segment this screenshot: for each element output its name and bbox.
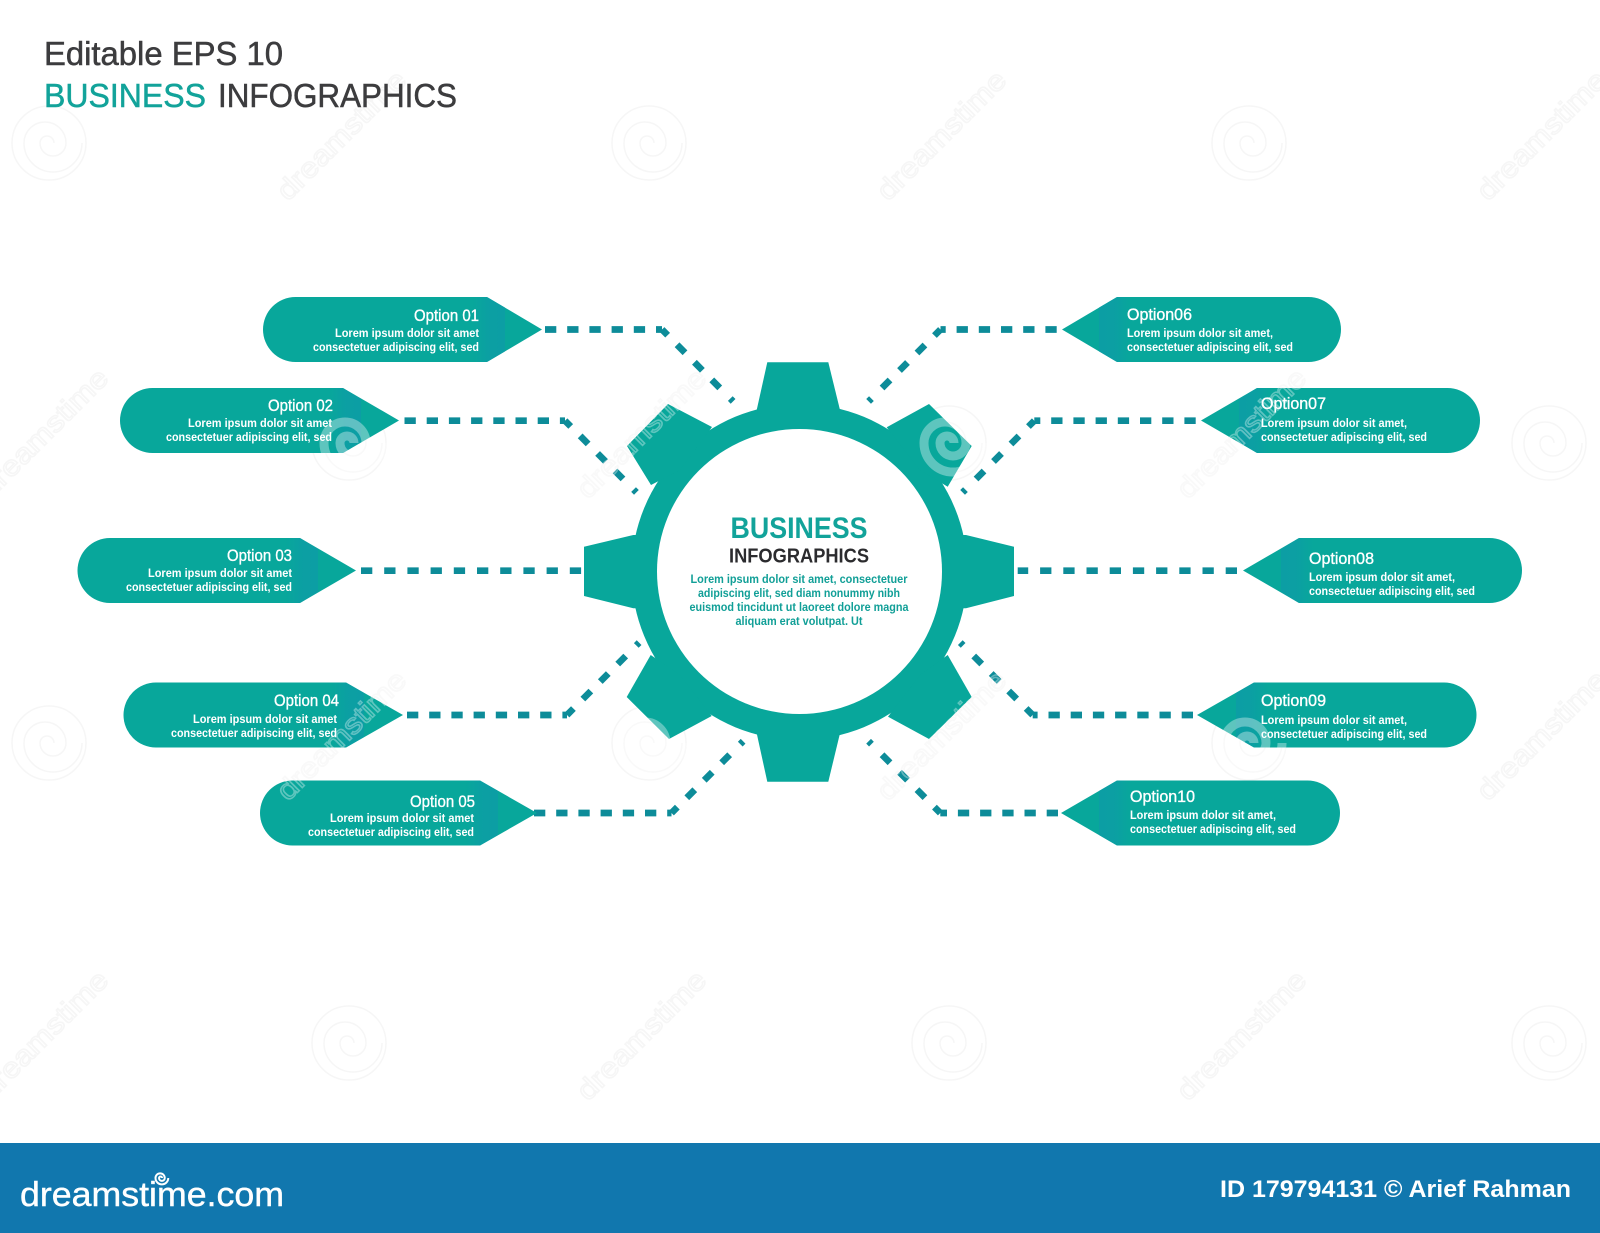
panel: option 07: consectetuer adipiscing elit, sed — [1261, 432, 1427, 444]
watermark: white spirals and text over the teal shapes: dreamstime — [1170, 362, 1312, 504]
panel: option 07 — [1201, 388, 1480, 453]
panel: option 03: consectetuer adipiscing elit, sed — [126, 582, 292, 594]
footer logo: dreamstime.com — [20, 1176, 284, 1214]
title: BUSINESS — [44, 77, 206, 114]
panel: option 03 — [78, 538, 356, 603]
center text block: Lorem ipsum dolor sit amet, consectetuer — [690, 574, 908, 586]
center text block: INFOGRAPHICS — [729, 546, 869, 568]
panel: option 05: consectetuer adipiscing elit, sed — [308, 827, 474, 839]
panel: option 03: Lorem ipsum dolor sit amet — [148, 568, 292, 580]
title — [44, 35, 457, 114]
panel: option 02: consectetuer adipiscing elit, sed — [166, 432, 332, 444]
panel: option 08: Lorem ipsum dolor sit amet, — [1309, 572, 1455, 584]
panel: option 10: Option10 — [1130, 788, 1195, 806]
panel: option 10 — [1061, 780, 1340, 846]
panel: option 03: Option 03 — [227, 547, 292, 565]
panel: option 01: consectetuer adipiscing elit, sed — [313, 342, 479, 354]
center text block: euismod tincidunt ut laoreet dolore magna — [690, 602, 909, 614]
watermark: faint spirals and diagonal text on the white background: dreamstime — [1470, 664, 1600, 806]
center text block: aliquam erat volutpat. Ut — [736, 616, 863, 628]
watermark: white spirals and text over the teal shapes — [270, 362, 1312, 806]
watermark: faint spirals and diagonal text on the white background: dreamstime — [570, 362, 712, 504]
center text block: BUSINESS — [730, 512, 868, 545]
watermark: white spirals and text over the teal shapes: dreamstime — [570, 362, 712, 504]
panel: option 02 — [120, 388, 399, 453]
panel: option 06 — [1062, 297, 1341, 362]
panel: option 04 — [124, 682, 403, 748]
panel: option 06: Lorem ipsum dolor sit amet, — [1127, 328, 1273, 340]
panel: option 09: Option09 — [1261, 692, 1326, 710]
panel: option 04: consectetuer adipiscing elit, sed — [171, 728, 337, 740]
watermark: faint spirals and diagonal text on the white background: dreamstime — [870, 664, 1012, 806]
panel: option 10: Lorem ipsum dolor sit amet, — [1130, 810, 1276, 822]
watermark: faint spirals and diagonal text on the white background: dreamstime — [1170, 362, 1312, 504]
title: INFOGRAPHICS — [218, 77, 457, 114]
panel: option 01: Lorem ipsum dolor sit amet — [335, 328, 479, 340]
panel: option 07: Option07 — [1261, 395, 1326, 413]
panel: option 05: Lorem ipsum dolor sit amet — [330, 813, 474, 825]
watermark: faint spirals and diagonal text on the white background: dreamstime — [1470, 64, 1600, 206]
panel: option 01: Option 01 — [414, 307, 479, 325]
panel: option 09 — [1197, 682, 1476, 748]
watermark: white spirals and text over the teal shapes: dreamstime — [270, 664, 412, 806]
title: Editable EPS 10 — [44, 35, 283, 72]
panel: option 01 — [263, 297, 542, 362]
panel: option 10: consectetuer adipiscing elit, sed — [1130, 824, 1296, 836]
panel: option 04: Lorem ipsum dolor sit amet — [193, 714, 337, 726]
watermark: faint spirals and diagonal text on the white background: dreamstime — [270, 664, 412, 806]
dashed connectors — [361, 330, 1237, 813]
footer band — [0, 1143, 1600, 1233]
panel: option 02: Option 02 — [268, 397, 333, 415]
panel: option 05: Option 05 — [410, 793, 475, 811]
panel: option 04: Option 04 — [274, 692, 339, 710]
panel: option 05 — [260, 780, 537, 846]
panel: option 09: Lorem ipsum dolor sit amet, — [1261, 715, 1407, 727]
center text block: adipiscing elit, sed diam nonummy nibh — [698, 588, 900, 600]
footer credit: ID 179794131 © Arief Rahman — [1220, 1176, 1571, 1203]
panel: option 08: Option08 — [1309, 550, 1374, 568]
panel: option 08: consectetuer adipiscing elit, sed — [1309, 586, 1475, 598]
watermark: faint spirals and diagonal text on the white background: dreamstime — [570, 964, 712, 1106]
icon: central gear — [584, 362, 1014, 782]
panel: option 09: consectetuer adipiscing elit, sed — [1261, 729, 1427, 741]
panel: option 07: Lorem ipsum dolor sit amet, — [1261, 418, 1407, 430]
watermark: faint spirals and diagonal text on the white background: dreamstime — [870, 64, 1012, 206]
watermark: white spirals and text over the teal shapes: dreamstime — [870, 664, 1012, 806]
panel: option 02: Lorem ipsum dolor sit amet — [188, 418, 332, 430]
panel: option 08 — [1243, 538, 1522, 603]
panel: option 06: Option06 — [1127, 306, 1192, 324]
panel: option 06: consectetuer adipiscing elit, sed — [1127, 342, 1293, 354]
watermark: faint spirals and diagonal text on the white background: dreamstime — [1170, 964, 1312, 1106]
watermark: faint spirals and diagonal text on the white background: dreamstime — [270, 64, 412, 206]
center text block — [690, 512, 909, 628]
